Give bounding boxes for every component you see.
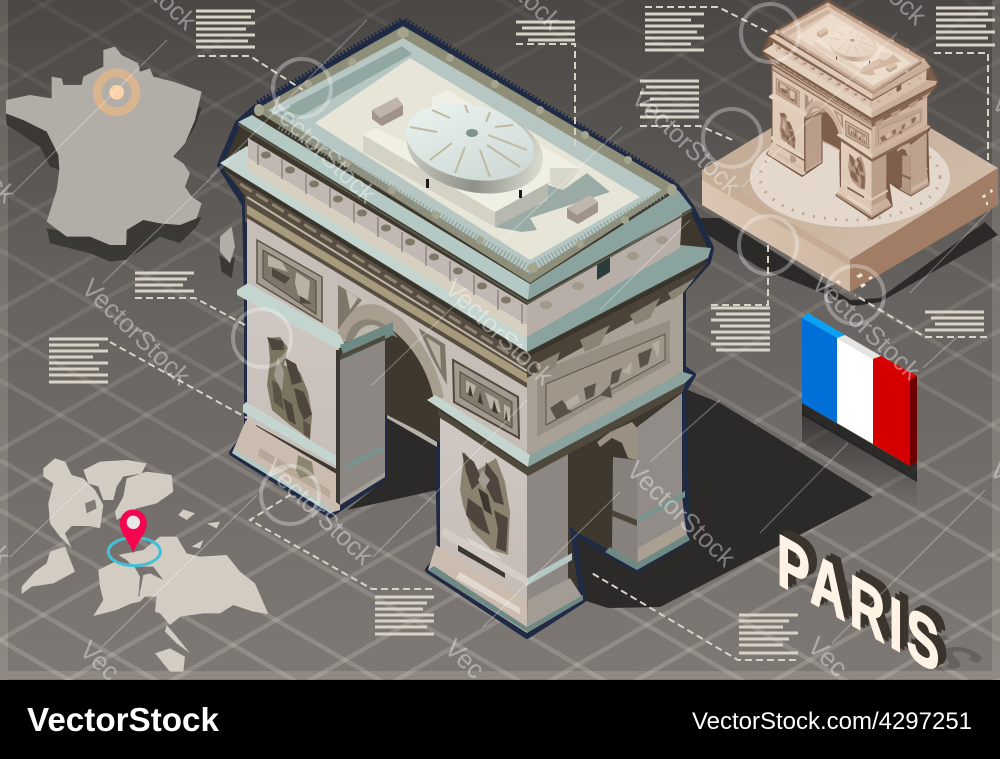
attic walls xyxy=(247,138,682,338)
left opening interior xyxy=(385,330,440,442)
roof dome xyxy=(399,92,551,205)
front pier xyxy=(428,418,583,633)
relief panel: upper left xyxy=(257,240,322,322)
watermark overlay: VectorStock xyxy=(626,83,747,201)
footer bar: VectorStock xyxy=(27,701,220,738)
watermark overlay: VectorStock xyxy=(259,453,380,571)
roof shadow xyxy=(495,173,610,232)
main arch monument xyxy=(220,21,711,636)
watermark overlay: Vec xyxy=(439,633,491,684)
rear right pier xyxy=(597,393,690,570)
diorama platform xyxy=(700,80,998,306)
main arch ground shadow xyxy=(347,388,873,608)
watermark overlay: Vec xyxy=(802,631,854,682)
statue relief: front pier xyxy=(460,452,510,560)
mid body: left face with arch xyxy=(247,190,527,462)
map: France xyxy=(6,47,235,278)
lower cornice xyxy=(220,146,711,356)
mid slab cornice xyxy=(237,283,693,476)
right opening interior xyxy=(570,436,613,552)
PARIS title: PARIS xyxy=(777,518,943,692)
flag of France xyxy=(802,313,917,510)
watermark overlay: VectorStock xyxy=(262,91,383,209)
watermark overlay: VectorStock xyxy=(76,273,197,391)
diorama miniature arch xyxy=(763,0,937,219)
entablature right xyxy=(527,262,708,378)
roof platform xyxy=(363,90,580,227)
PARIS title: PARIS xyxy=(781,515,947,689)
watermark overlay: VectorStock xyxy=(439,273,560,391)
relief panel: front left xyxy=(453,360,519,438)
watermark overlay: VectorStock xyxy=(806,268,927,386)
left arch rear base strip xyxy=(387,412,437,447)
roof terrace xyxy=(254,21,677,283)
footer bar xyxy=(0,680,1000,759)
footer bar: VectorStock.com/4297251 xyxy=(692,708,972,735)
upper cornice xyxy=(238,115,692,303)
mid body: right face frieze xyxy=(527,285,683,460)
left pier xyxy=(232,295,385,513)
map: world with location pin xyxy=(22,458,268,672)
watermark overlay: VectorStock xyxy=(621,455,742,573)
arch silhouette outline xyxy=(220,23,711,636)
statue relief: left pier xyxy=(267,337,314,478)
watermark overlay: Vec xyxy=(74,635,126,686)
roof vents xyxy=(372,97,598,224)
PARIS title: PARIS xyxy=(785,513,951,687)
entablature left xyxy=(224,170,527,394)
PARIS title xyxy=(764,513,1000,692)
